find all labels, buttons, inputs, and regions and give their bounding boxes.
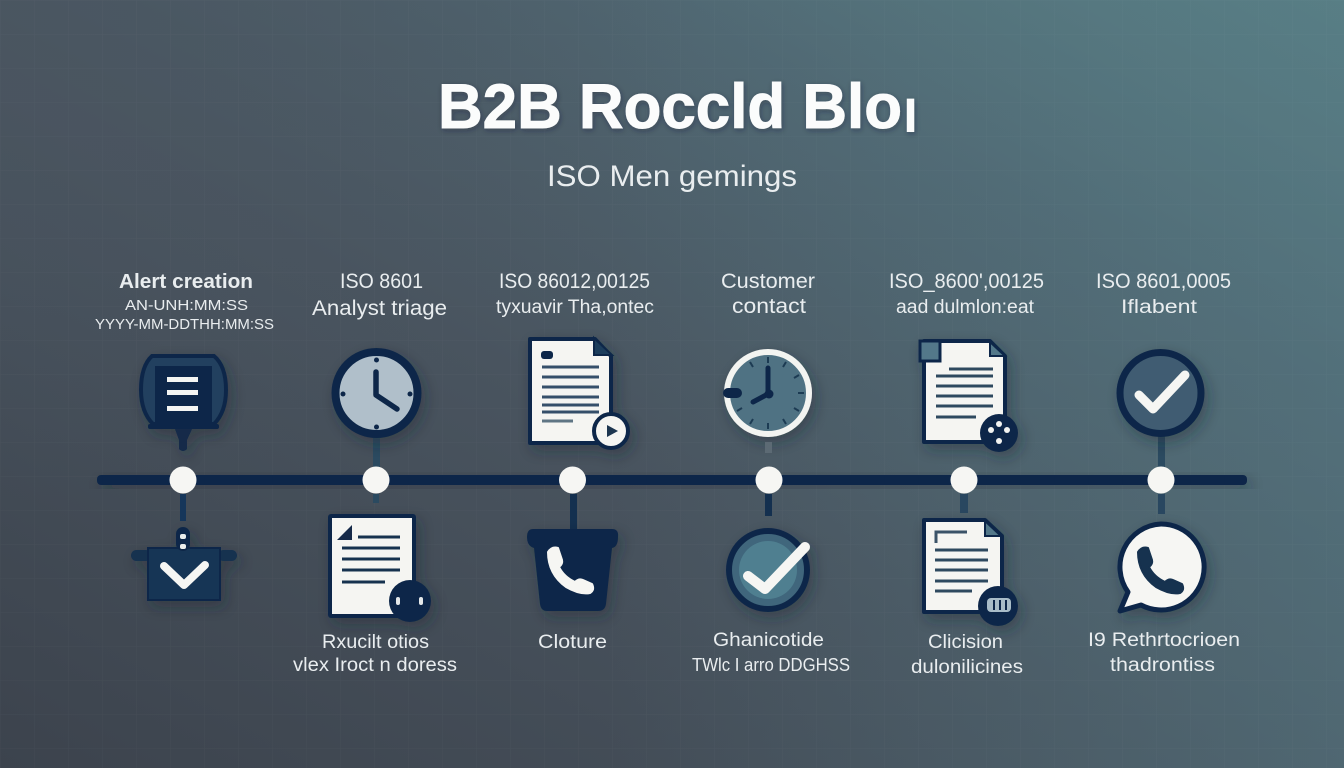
- step 3 bottom label: Cloture: [538, 632, 607, 653]
- step 1 marker: [170, 466, 196, 494]
- step 4 bottom label: TWlc I arro DDGHSS: [692, 655, 850, 675]
- step 4 bottom label: Ghanicotide: [713, 630, 824, 651]
- step 3 connector: [570, 494, 577, 530]
- icon: phone bucket: [527, 529, 618, 611]
- step 1 connector: [180, 494, 186, 521]
- step 2 label: Analyst triage: [312, 297, 447, 320]
- step 6: incident result: [1088, 270, 1240, 676]
- step 1: alert creation: [95, 271, 274, 600]
- step 6 upper connector: [1158, 436, 1165, 468]
- icon: alert document on stand: [141, 356, 226, 451]
- icon: report with badge: [330, 516, 431, 622]
- step 5 label: ISO_8600',00125: [889, 270, 1044, 293]
- step 2 upper connector: [373, 436, 380, 470]
- step 2 bottom label: [293, 632, 457, 676]
- step 2 label: ISO 8601: [340, 270, 423, 293]
- step 6 bottom label: [1088, 630, 1240, 676]
- step 4 bottom label: [692, 630, 850, 675]
- icon: document with play badge: [530, 338, 628, 448]
- step 4 marker: [756, 466, 782, 494]
- step 6 label: Iflabent: [1121, 297, 1198, 318]
- icon: check envelope: [131, 527, 237, 600]
- step 5 label: [889, 270, 1044, 318]
- step 6 label: ISO 8601,0005: [1096, 270, 1231, 293]
- step 2 marker: [362, 466, 390, 494]
- step 5 bottom label: Clicision: [928, 632, 1003, 653]
- icon: stopwatch: [723, 352, 809, 434]
- step 4 label: contact: [732, 295, 806, 318]
- step 3 marker: [559, 466, 586, 494]
- step 4 lower connector: [765, 494, 772, 516]
- step 6 bottom label: I9 Rethrtocrioen: [1088, 630, 1240, 651]
- step 6 lower connector: [1158, 494, 1165, 514]
- step 5 connector: [960, 494, 968, 513]
- icon: check badge: [729, 531, 807, 609]
- icon: document with settings badge: [920, 341, 1018, 452]
- step 2 bottom label: vlex Iroct n doress: [293, 655, 457, 676]
- step 4 upper connector: [765, 442, 772, 453]
- step 2 lower connector: [373, 494, 379, 503]
- title: ı: [903, 76, 918, 146]
- timeline axis: [97, 475, 1247, 485]
- step 2 label: [312, 270, 447, 320]
- step 3 label: [496, 270, 654, 318]
- step 3 label: ISO 86012,00125: [499, 270, 650, 293]
- step 4: customer contact: [692, 270, 850, 675]
- step 3 label: tyxuavir Tha,ontec: [496, 297, 654, 318]
- step 6 label: [1096, 270, 1231, 318]
- icon: phone speech bubble: [1120, 524, 1204, 611]
- step 4 label: [721, 270, 815, 318]
- step 1 label: [95, 271, 274, 333]
- icon: check circle: [1120, 352, 1201, 434]
- icon: clock: [336, 352, 418, 434]
- title: B2B Roccld Blo: [438, 72, 902, 142]
- step 5: decision document: [889, 270, 1044, 678]
- step 5 bottom label: dulonilicines: [911, 657, 1023, 678]
- step 3: document and call: [496, 270, 654, 653]
- step 5 marker: [950, 466, 978, 494]
- step 2: analyst triage: [293, 270, 457, 676]
- step 6 bottom label: thadrontiss: [1110, 655, 1215, 676]
- step 2 bottom label: Rxucilt otios: [322, 632, 429, 653]
- icon: document with storage badge: [924, 520, 1018, 626]
- step 4 label: Customer: [721, 270, 815, 293]
- subtitle: ISO Men gemings: [547, 160, 797, 193]
- step 5 label: aad dulmlon:eat: [896, 297, 1035, 318]
- step 1 label: Alert creation: [119, 271, 253, 293]
- step 5 bottom label: [911, 632, 1023, 678]
- step 1 label: YYYY-MM-DDTHH:MM:SS: [95, 316, 274, 333]
- step 1 label: AN-UNH:MM:SS: [125, 297, 248, 314]
- step 6 marker: [1148, 466, 1174, 494]
